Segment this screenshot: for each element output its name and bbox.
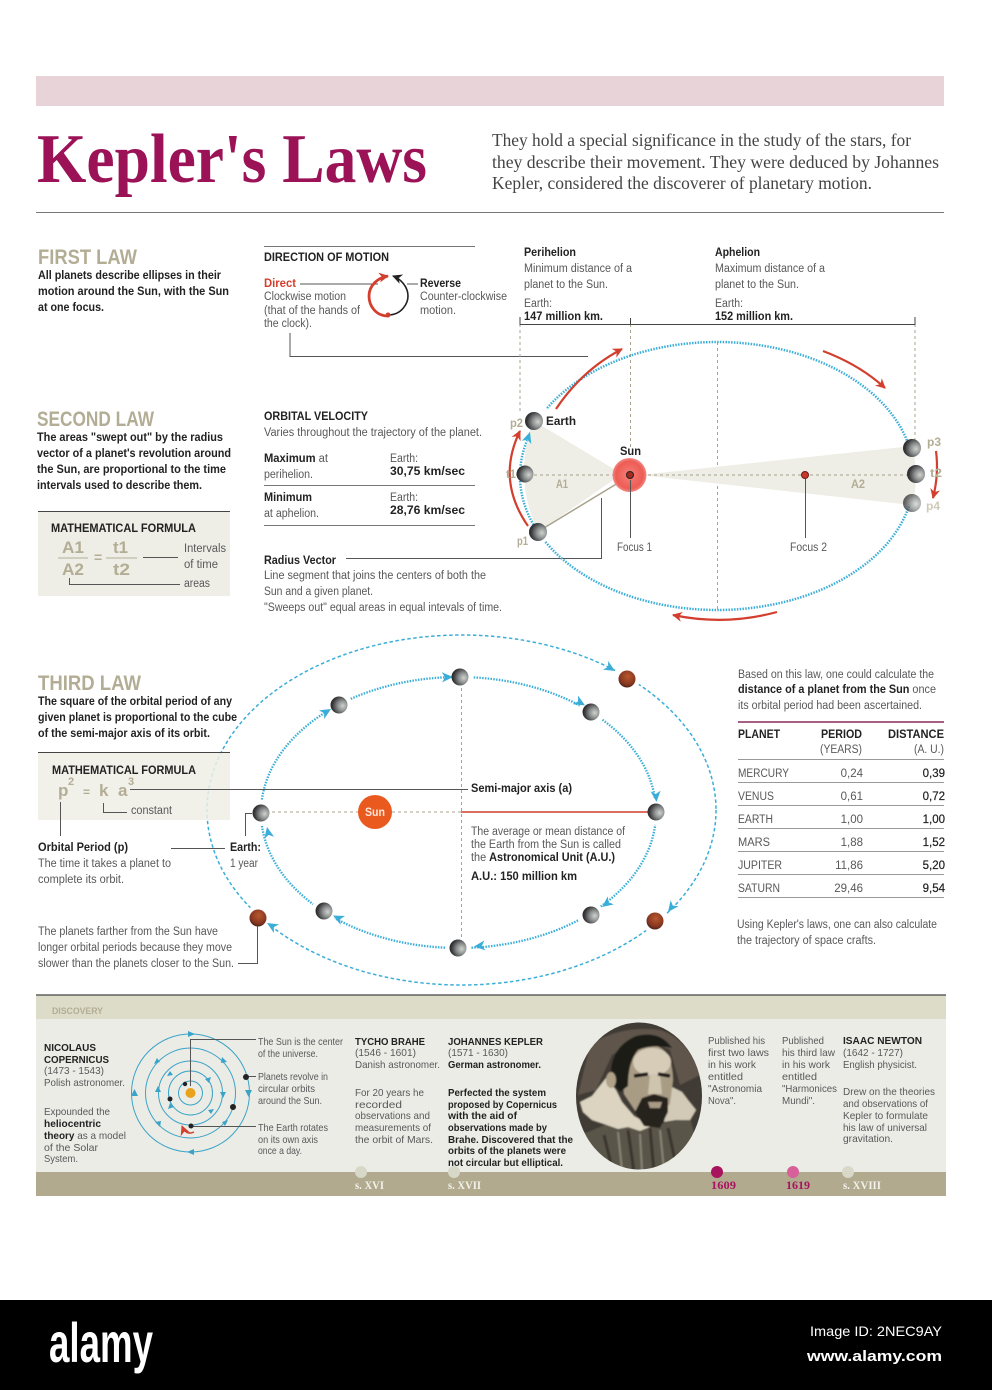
tycho brahe text: TYCHO BRAHE <box>355 1036 425 1048</box>
publication notes: "Harmonices <box>782 1083 837 1095</box>
johannes kepler text: (1571 - 1630) <box>448 1047 508 1059</box>
timeline markers: s. XVII <box>448 1178 481 1192</box>
publication notes: his third law <box>782 1047 835 1059</box>
perihelion text <box>524 247 633 323</box>
reverse label: Reverse <box>420 278 461 290</box>
footer bar: alamy <box>49 1311 153 1374</box>
perihelion text: Perihelion <box>524 247 576 259</box>
timeline markers: 1619 <box>786 1178 810 1192</box>
model notes: circular orbits <box>258 1083 315 1095</box>
panel: orbital velocity: ORBITAL VELOCITY <box>264 411 368 423</box>
table: planets: PERIOD <box>821 729 862 741</box>
formula box: second law: t1 <box>113 538 128 557</box>
footer bar <box>0 1300 992 1390</box>
astronomical unit note: The average or mean distance of <box>471 826 626 838</box>
first law statement: motion around the Sun, with the Sun <box>38 286 229 298</box>
formula box: third law <box>38 752 468 820</box>
orbit ellipse <box>520 342 914 610</box>
formula box: second law: of time <box>184 559 218 571</box>
table: planets: 9,54 <box>923 883 946 895</box>
isaac newton text <box>843 1035 935 1145</box>
footer bar: Image ID: 2NEC9AY <box>810 1323 943 1339</box>
swept area A1 <box>524 421 622 532</box>
orbital period text: complete its orbit. <box>38 874 124 886</box>
johannes kepler text: German astronomer. <box>448 1059 541 1071</box>
table: planets: 1,88 <box>841 837 863 849</box>
table: planets: (YEARS) <box>820 744 862 756</box>
model notes: around the Sun. <box>258 1095 322 1107</box>
reverse label: Counter-clockwise <box>420 291 507 303</box>
formula box: second law: t2 <box>113 560 130 579</box>
table: planets: EARTH <box>738 814 773 826</box>
model notes <box>258 1036 343 1157</box>
planets <box>250 668 664 956</box>
isaac newton text: Drew on the theories <box>843 1086 935 1098</box>
sun <box>612 458 646 492</box>
second law statement: vector of a planet's revolution around <box>37 448 231 460</box>
planet position labels: t2 <box>930 468 942 480</box>
panel: orbital velocity: 28,76 km/sec <box>390 505 466 517</box>
tycho brahe text: measurements of <box>355 1122 431 1134</box>
footer bar: www.alamy.com <box>806 1348 942 1365</box>
text: distance note <box>738 669 936 712</box>
icon: direction circle arrows <box>300 276 418 318</box>
table: planets: 0,39 <box>923 768 945 780</box>
panel: orbital velocity: Maximum at <box>264 453 329 465</box>
timeline markers: s. XVI <box>355 1178 384 1192</box>
sun: Sun <box>365 807 385 819</box>
panel: second law text <box>37 408 231 596</box>
perihelion text: Earth: <box>524 298 552 310</box>
timeline markers: s. XVIII <box>843 1178 881 1192</box>
chart: first and second law orbit diagram <box>506 317 942 620</box>
earth one year label: Earth: <box>230 842 261 854</box>
panel: radius vector: Line segment that joins the centers of both the <box>264 570 486 582</box>
johannes kepler text: Perfected the system <box>448 1087 546 1099</box>
timeline markers <box>355 1166 881 1192</box>
panel: orbital velocity: 30,75 km/sec <box>390 466 466 478</box>
chart: third law orbits <box>207 635 716 985</box>
table: planets <box>738 722 946 898</box>
planet position labels: t1 <box>506 469 517 481</box>
planets <box>516 412 925 541</box>
formula box: third law: constant <box>131 805 173 817</box>
copernicus text: heliocentric <box>44 1118 101 1130</box>
formula box: third law: a <box>118 781 128 800</box>
orbit direction arrowheads <box>267 668 671 946</box>
intro text <box>492 130 939 193</box>
tycho brahe text: recorded <box>355 1099 402 1111</box>
johannes kepler text <box>447 1036 573 1169</box>
astronomical unit note: A.U.: 150 million km <box>471 871 577 883</box>
swept area A2 <box>640 446 916 505</box>
formula box: third law: 3 <box>128 776 134 788</box>
tycho brahe text: the orbit of Mars. <box>355 1134 433 1146</box>
isaac newton text: and observations of <box>843 1098 928 1110</box>
aphelion text <box>715 247 826 323</box>
copernicus text <box>44 1042 126 1165</box>
formula box: second law <box>38 511 230 596</box>
third law statement: given planet is proportional to the cube <box>38 712 237 724</box>
model notes: The Earth rotates <box>258 1122 328 1134</box>
formula box: second law: A1 <box>62 538 84 557</box>
johannes kepler text: with the aid of <box>447 1110 517 1122</box>
reverse label: motion. <box>420 305 456 317</box>
copernicus text: of the Solar <box>44 1142 99 1154</box>
panel: radius vector: "Sweeps out" equal areas in equal intevals of time. <box>264 602 502 614</box>
table: planets: (A. U.) <box>914 744 944 756</box>
formula box: second law: A2 <box>62 560 84 579</box>
panel: radius vector: Radius Vector <box>264 555 336 567</box>
table: planets: SATURN <box>738 883 780 895</box>
radius vector line <box>539 483 618 531</box>
planet position labels: p1 <box>517 536 528 548</box>
direct label: Direct <box>264 278 296 290</box>
sun <box>358 795 392 829</box>
chart: first and second law orbit diagram: Sun <box>620 446 641 458</box>
panel: orbital velocity: Earth: <box>390 492 418 504</box>
focus 2 <box>802 472 808 478</box>
publication notes: first two laws <box>708 1047 769 1059</box>
table: planets: PLANET <box>738 729 780 741</box>
johannes kepler text: not circular but elliptical. <box>448 1157 563 1169</box>
heading: third law: THIRD LAW <box>38 672 141 695</box>
panel: direction of motion <box>264 246 588 356</box>
johannes kepler text: observations made by <box>448 1122 547 1134</box>
gaps around planets <box>245 664 669 961</box>
table: planets: 1,00 <box>923 814 945 826</box>
johannes kepler text: orbits of the planets were <box>448 1145 566 1157</box>
perihelion text: planet to the Sun. <box>524 279 608 291</box>
heading: second law: SECOND LAW <box>37 408 154 431</box>
publication notes: Nova". <box>708 1095 736 1107</box>
intro text: Kepler, considered the discoverer of planetary motion. <box>492 173 872 193</box>
publication notes <box>708 1035 837 1107</box>
farther planets text: slower than the planets closer to the Sun. <box>38 958 234 970</box>
planet position labels: p3 <box>927 437 941 449</box>
tycho brahe text: For 20 years he <box>355 1087 424 1099</box>
copernicus text: Polish astronomer. <box>44 1077 125 1089</box>
text: spacecraft note <box>737 919 937 947</box>
model notes: Planets revolve in <box>258 1071 328 1083</box>
model notes: of the universe. <box>258 1048 318 1060</box>
third law statement: The square of the orbital period of any <box>38 696 233 708</box>
table: planets: 5,20 <box>923 860 945 872</box>
orbital period text: The time it takes a planet to <box>38 858 171 870</box>
tycho brahe text: observations and <box>355 1110 430 1122</box>
earth one year label: 1 year <box>230 858 258 870</box>
first law statement <box>38 270 229 314</box>
panel: first law text <box>38 246 229 314</box>
publication notes: in his work <box>782 1059 831 1071</box>
table: planets: 11,86 <box>835 860 863 872</box>
reverse label <box>420 278 507 317</box>
model notes: once a day. <box>258 1145 302 1157</box>
formula box: third law: = <box>83 785 90 799</box>
copernicus text: System. <box>44 1153 78 1165</box>
johannes kepler text: Brahe. Discovered that the <box>448 1134 573 1146</box>
outer orbit <box>207 635 716 985</box>
copernicus text: (1473 - 1543) <box>44 1065 104 1077</box>
astronomical unit note: the Earth from the Sun is called <box>471 839 621 851</box>
formula box: third law: k <box>99 781 109 800</box>
publication notes: in his work <box>708 1059 757 1071</box>
aphelion text: planet to the Sun. <box>715 279 799 291</box>
isaac newton text: (1642 - 1727) <box>843 1047 903 1059</box>
publication notes: Mundi". <box>782 1095 815 1107</box>
table: planets: 29,46 <box>834 883 863 895</box>
farther planets text <box>38 926 258 970</box>
first law statement: All planets describe ellipses in their <box>38 270 221 282</box>
orbital period text <box>38 842 171 886</box>
panel: discovery timeline <box>36 995 946 1196</box>
formula box: second law: = <box>94 549 102 565</box>
second law statement: intervals used to describe them. <box>37 480 202 492</box>
isaac newton text: Kepler to formulate <box>843 1110 928 1122</box>
chart: heliocentric model <box>131 1031 256 1155</box>
panel: orbital velocity <box>264 411 482 526</box>
direct label: (that of the hands of <box>264 305 361 317</box>
direct label: the clock). <box>264 318 312 330</box>
aphelion text: Aphelion <box>715 247 760 259</box>
model notes: on its own axis <box>258 1134 318 1146</box>
model notes: The Sun is the center <box>258 1036 343 1048</box>
measure line <box>520 317 915 324</box>
johannes kepler text: proposed by Copernicus <box>448 1099 557 1111</box>
planet position labels: p4 <box>926 501 941 513</box>
astronomical unit note: the Astronomical Unit (A.U.) <box>471 852 615 864</box>
table: planets: 1,52 <box>923 837 945 849</box>
third law statement <box>38 696 237 740</box>
text: spacecraft note: Using Kepler's laws, one can also calculate <box>737 919 937 931</box>
panel: orbital velocity: perihelion. <box>264 469 313 481</box>
table: planets: 0,61 <box>841 791 863 803</box>
publication notes: "Astronomia <box>708 1083 762 1095</box>
second law statement <box>37 432 231 492</box>
perihelion text: Minimum distance of a <box>524 263 633 275</box>
table: planets: DISTANCE <box>888 729 944 741</box>
heading: direction of motion: DIRECTION OF MOTION <box>264 252 389 264</box>
timeline markers: 1609 <box>711 1178 736 1192</box>
publication notes: entitled <box>708 1071 743 1083</box>
isaac newton text: ISAAC NEWTON <box>843 1035 922 1047</box>
formula box: second law: areas <box>184 578 210 590</box>
chart: third law orbits: Semi-major axis (a) <box>471 783 572 795</box>
chart: first and second law orbit diagram: A2 <box>851 479 865 491</box>
table: planets: 0,72 <box>923 791 945 803</box>
second law statement: the Sun, are proportional to the time <box>37 464 226 476</box>
panel: radius vector: Sun and a given planet. <box>264 586 373 598</box>
chart: first and second law orbit diagram: Focus 2 <box>790 542 827 554</box>
publication notes: Published his <box>708 1035 765 1047</box>
copernicus text: Expounded the <box>44 1106 110 1118</box>
text: distance note: Based on this law, one could calculate the <box>738 669 934 681</box>
table: planets: 0,24 <box>841 768 864 780</box>
text: distance note: distance of a planet from the Sun once <box>738 684 936 696</box>
isaac newton text: his law of universal <box>843 1122 927 1134</box>
isaac newton text: gravitation. <box>843 1133 893 1145</box>
table: planets: MERCURY <box>738 768 789 780</box>
planet position labels: p2 <box>510 418 523 430</box>
isaac newton text: English physicist. <box>843 1059 917 1071</box>
table: planets: MARS <box>738 837 770 849</box>
heading: discovery: DISCOVERY <box>52 1006 103 1016</box>
table: planets: JUPITER <box>738 860 782 872</box>
semi-major axis line <box>461 811 656 813</box>
formula box: second law: MATHEMATICAL FORMULA <box>51 523 196 535</box>
heading: first law: FIRST LAW <box>38 246 137 269</box>
intro text: They hold a special significance in the study of the stars, for <box>492 130 911 150</box>
formula box: third law: 2 <box>68 776 74 788</box>
tycho brahe text <box>355 1036 440 1146</box>
text: distance note: its orbital period had been ascertained. <box>738 700 922 712</box>
earth one year label <box>171 814 261 870</box>
red direction arrows <box>510 349 937 620</box>
copernicus text: NICOLAUS <box>44 1042 96 1054</box>
aphelion text: Maximum distance of a <box>715 263 826 275</box>
formula box: second law: Intervals <box>184 543 226 555</box>
copernicus text: theory as a model <box>44 1130 126 1142</box>
title: Kepler's Laws <box>37 121 427 198</box>
aphelion text: 152 million km. <box>715 311 793 323</box>
panel: orbital velocity: Minimum <box>264 492 312 504</box>
first law statement: at one focus. <box>38 302 104 314</box>
portrait of kepler <box>576 1022 702 1170</box>
third law statement: of the semi-major axis of its orbit. <box>38 728 210 740</box>
aphelion text: Earth: <box>715 298 743 310</box>
chart: first and second law orbit diagram: Focus 1 <box>617 542 652 554</box>
formula box: third law: MATHEMATICAL FORMULA <box>52 765 196 777</box>
table: planets: 1,00 <box>841 814 863 826</box>
direct label <box>264 278 361 330</box>
table: planets: VENUS <box>738 791 774 803</box>
panel: orbital velocity: Earth: <box>390 453 418 465</box>
formula box: third law: p <box>58 781 68 800</box>
intro text: they describe their movement. They were deduced by Johannes <box>492 152 939 172</box>
connector to orbit arrow <box>290 333 588 356</box>
decorative top band <box>36 76 944 106</box>
publication notes: entitled <box>782 1071 817 1083</box>
text: spacecraft note: the trajectory of space crafts. <box>737 935 876 947</box>
orbital period text: Orbital Period (p) <box>38 842 128 854</box>
direct label: Clockwise motion <box>264 291 346 303</box>
perihelion text: 147 million km. <box>524 311 603 323</box>
panel: orbital velocity: Varies throughout the trajectory of the planet. <box>264 427 482 439</box>
johannes kepler text: JOHANNES KEPLER <box>448 1036 543 1048</box>
chart: first and second law orbit diagram: Earth <box>546 416 576 428</box>
farther planets text: The planets farther from the Sun have <box>38 926 218 938</box>
second law statement: The areas "swept out" by the radius <box>37 432 223 444</box>
copernicus text: COPERNICUS <box>44 1054 109 1066</box>
chart: first and second law orbit diagram: A1 <box>556 479 568 491</box>
panel: orbital velocity: at aphelion. <box>264 508 319 520</box>
planet position labels <box>506 418 942 548</box>
inner orbit <box>261 677 656 948</box>
tycho brahe text: (1546 - 1601) <box>355 1047 416 1059</box>
panel: third law text <box>38 672 468 970</box>
farther planets text: longer orbital periods because they move <box>38 942 232 954</box>
panel: radius vector <box>264 498 602 614</box>
astronomical unit note <box>471 826 626 883</box>
publication notes: Published <box>782 1035 824 1047</box>
tycho brahe text: Danish astronomer. <box>355 1059 440 1071</box>
